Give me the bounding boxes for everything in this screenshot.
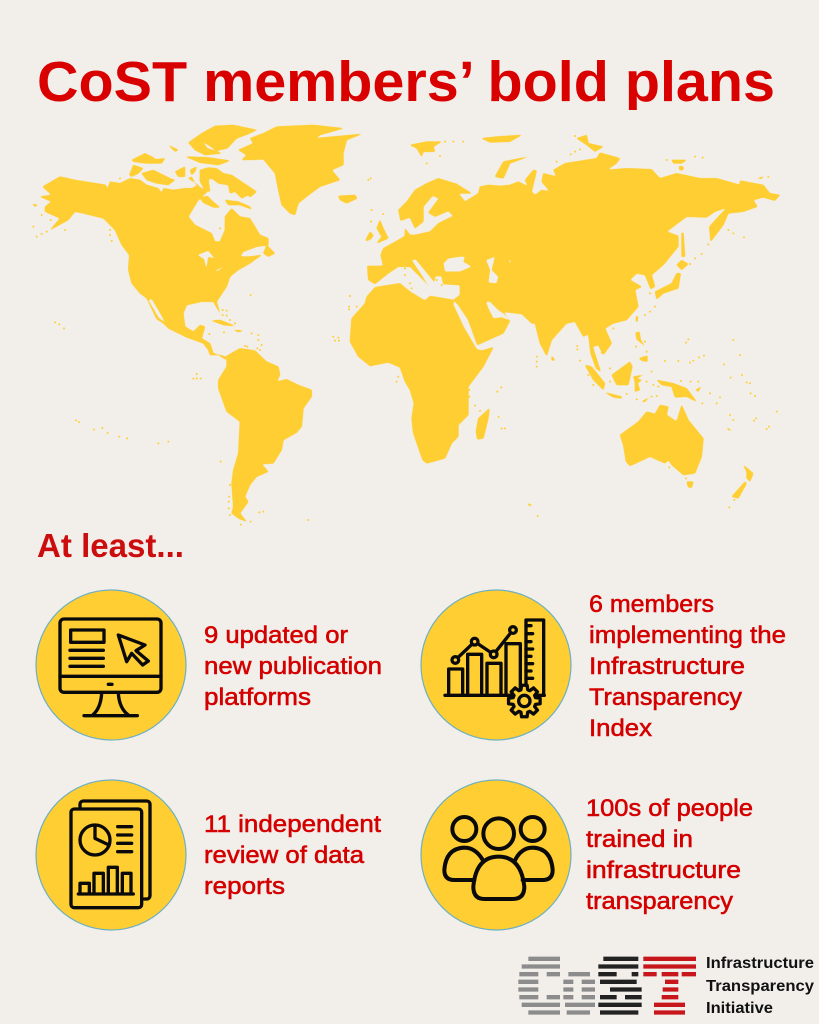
logo text: Infrastructure xyxy=(706,955,814,972)
text: 9 platforms xyxy=(204,622,382,711)
map: Africa, Eurasia, Oceania xyxy=(350,135,780,506)
text: 9 platforms: 9 updated or xyxy=(204,622,348,649)
text: 11 reports: reports xyxy=(204,873,285,900)
map: seas overlay xyxy=(412,257,512,321)
logo text xyxy=(706,955,814,1017)
logo: CoST Infrastructure Transparency Initiative xyxy=(518,955,814,1017)
panel: publication platforms xyxy=(36,590,382,740)
text: 11 reports: review of data xyxy=(204,842,365,869)
text: 9 platforms: platforms xyxy=(204,684,311,711)
icon: report document xyxy=(36,780,186,930)
logo text: Initiative xyxy=(706,1000,773,1017)
text: 6 members: Index xyxy=(589,715,652,742)
subheading: At least... xyxy=(37,527,184,564)
panel: people trained xyxy=(421,780,753,930)
title: CoST members’ bold plans xyxy=(37,50,775,114)
panel: review reports xyxy=(36,780,381,930)
text: 9 platforms: new publication xyxy=(204,653,382,680)
text: 100s of people xyxy=(586,795,753,915)
text: 6 members: 6 members xyxy=(589,591,714,618)
text: 100s of people: infrastructure xyxy=(586,857,741,884)
icon: group of people xyxy=(421,780,571,930)
text: 11 reports xyxy=(204,811,381,900)
text: 100s of people: transparency xyxy=(586,888,733,915)
map: land masses xyxy=(0,110,819,530)
world map xyxy=(0,110,819,530)
icon: monitor with cursor xyxy=(36,590,186,740)
text: 6 members: Transparency xyxy=(589,684,742,711)
text: 6 members: implementing the xyxy=(589,622,786,649)
text: 6 members: Infrastructure xyxy=(589,653,745,680)
text: 100s of people: 100s of people xyxy=(586,795,753,822)
map: lakes and gulfs overlay xyxy=(148,251,228,323)
panel: transparency index xyxy=(421,590,786,742)
icon: chart with ruler and gear xyxy=(421,590,571,740)
text: 6 members xyxy=(589,591,786,742)
text: 11 reports: 11 independent xyxy=(204,811,381,838)
logo mark: striped letters xyxy=(518,957,696,1015)
text: 100s of people: trained in xyxy=(586,826,693,853)
map: small islands xyxy=(33,136,777,525)
map: Americas and Greenland xyxy=(32,125,362,522)
logo text: Transparency xyxy=(706,978,814,995)
